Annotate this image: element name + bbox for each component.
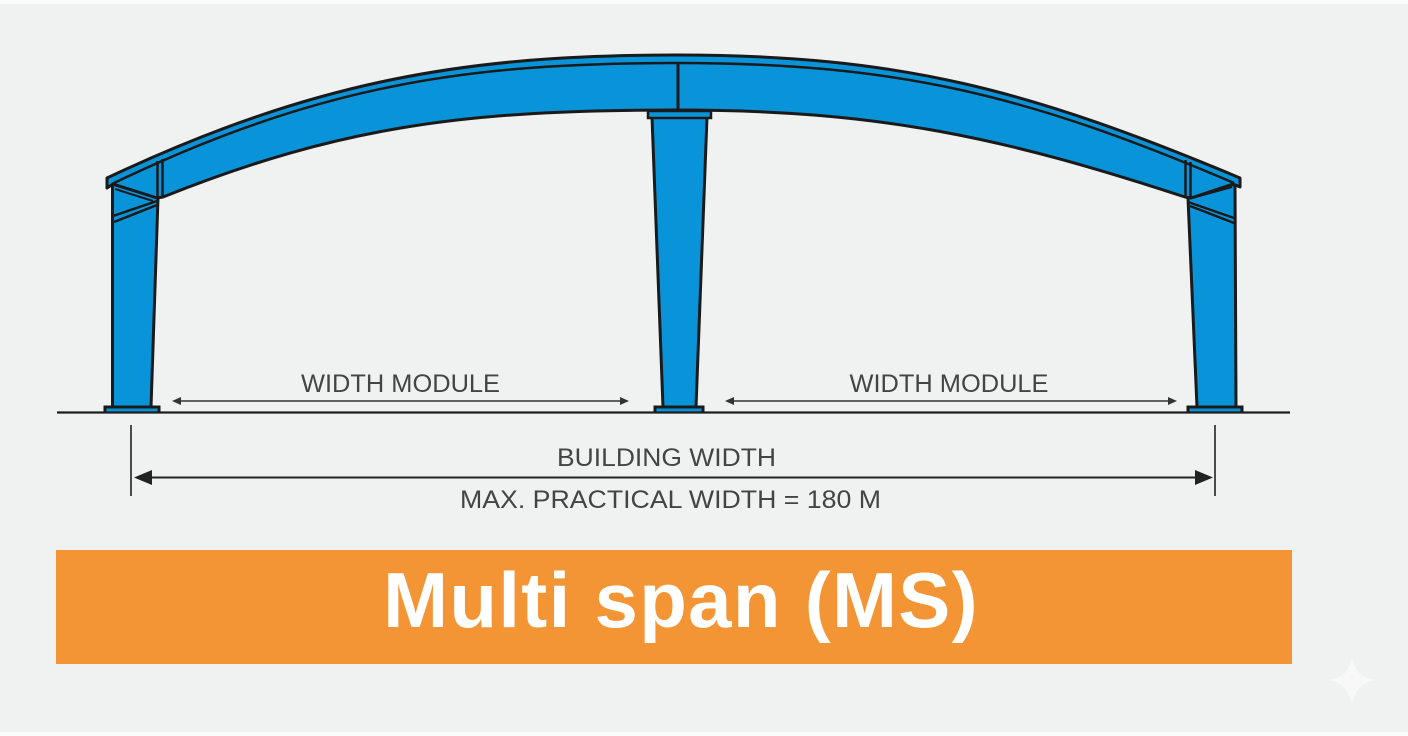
centre column: [648, 111, 711, 412]
icon: sparkle watermark: [1327, 656, 1377, 705]
width module dimension: right: [725, 370, 1177, 405]
arched roof beam: [107, 55, 1240, 201]
right column: [1188, 184, 1242, 412]
width module dimension: left: [172, 370, 629, 405]
title banner: [56, 550, 1292, 664]
title banner: Multi span (MS): [383, 556, 979, 644]
width module dimension: left: WIDTH MODULE: [301, 370, 500, 398]
ground line: [57, 411, 1290, 414]
width module dimension: right: WIDTH MODULE: [850, 370, 1048, 398]
building width dimension: BUILDING WIDTH: [557, 444, 776, 472]
left column: [105, 184, 159, 412]
building width dimension: MAX. PRACTICAL WIDTH = 180 M: [460, 486, 881, 514]
building width dimension: [131, 425, 1215, 514]
